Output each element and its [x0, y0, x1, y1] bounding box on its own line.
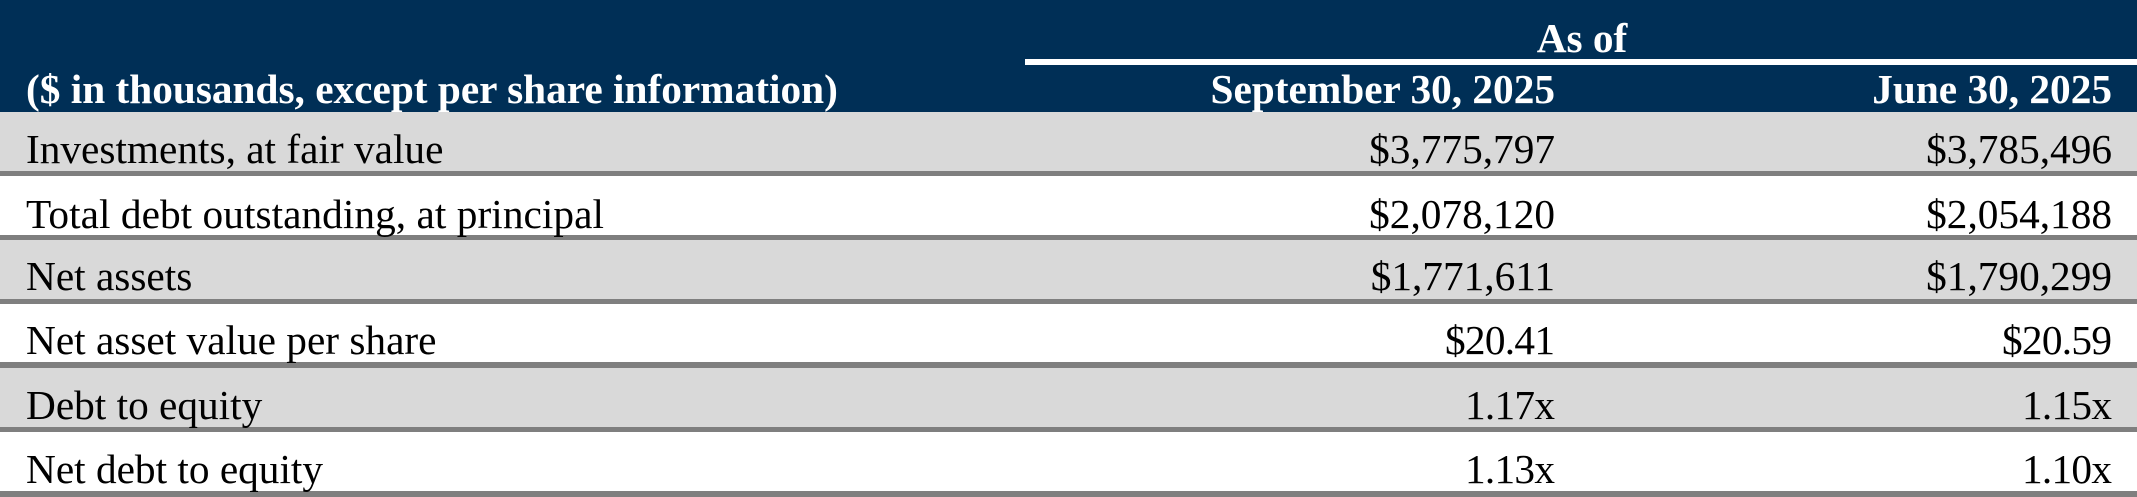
row: Investments, at fair value: Investments, at fair value [26, 126, 443, 172]
row: Net assets [0, 240, 2137, 304]
row: Debt to equity: Debt to equity [26, 382, 263, 428]
row: Net asset value per share: $20.59 [2002, 317, 2112, 363]
heading: As of: As of [1537, 15, 1629, 61]
row: Total debt outstanding, at principal: Total debt outstanding, at principal [26, 191, 604, 237]
row: Total debt outstanding, at principal: $2,078,120 [1369, 191, 1555, 237]
row: Net asset value per share: Net asset value per share [26, 317, 436, 363]
row: Net debt to equity: 1.13x [1465, 446, 1555, 492]
row: Total debt outstanding, at principal: $2,054,188 [1926, 191, 2112, 237]
heading: June 30, 2025: June 30, 2025 [1872, 66, 2112, 112]
row: Net debt to equity: Net debt to equity [26, 446, 323, 492]
row: Debt to equity: 1.15x [2022, 382, 2112, 428]
row: Net debt to equity [0, 446, 2137, 497]
row: Net assets: $1,771,611 [1371, 253, 1555, 299]
row: Investments, at fair value [0, 112, 2137, 176]
row: Net assets: Net assets [26, 253, 192, 299]
row: Investments, at fair value: $3,775,797 [1369, 126, 1555, 172]
row: Investments, at fair value: $3,785,496 [1926, 126, 2112, 172]
row: Debt to equity [0, 368, 2137, 432]
header rule under As of [1025, 59, 2137, 65]
table header band [0, 0, 2137, 113]
row: Total debt outstanding, at principal [0, 191, 2137, 240]
row: Net asset value per share [0, 317, 2137, 368]
row: Net asset value per share: $20.41 [1445, 317, 1555, 363]
row: Debt to equity: 1.17x [1465, 382, 1555, 428]
row: Net assets: $1,790,299 [1926, 253, 2112, 299]
heading: units note: ($ in thousands, except per share information) [26, 66, 838, 113]
heading: September 30, 2025: September 30, 2025 [1210, 66, 1555, 112]
row: Net debt to equity: 1.10x [2022, 446, 2112, 492]
